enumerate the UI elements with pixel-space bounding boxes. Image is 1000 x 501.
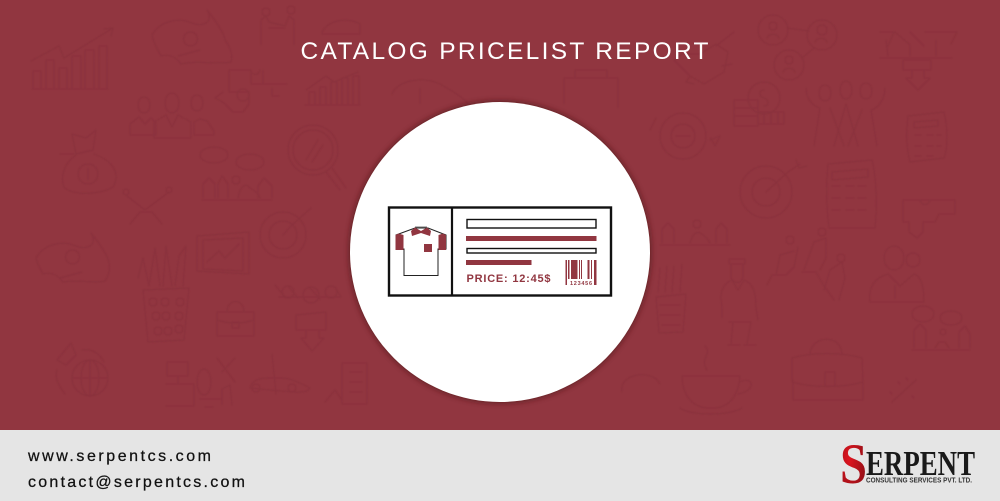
icon: windmill and car (250, 354, 310, 394)
logo: Serpent Consulting Services (840, 433, 975, 496)
icon: bellboy (721, 259, 758, 345)
icon: talking people 2 (660, 220, 730, 245)
icon: group and arrow (275, 285, 341, 351)
icon: people and arrow (880, 32, 957, 90)
icon: three people (130, 93, 214, 138)
icon: desk and person (166, 358, 235, 407)
red text line 2 (466, 260, 532, 265)
icon: idea cloud (392, 80, 468, 104)
icon: scattered dots (890, 378, 916, 402)
icon: briefcase (217, 302, 254, 336)
central white circle (350, 102, 650, 402)
icon: network (123, 187, 172, 224)
icon: speech blob (622, 375, 660, 392)
outlined text line 2 (467, 248, 596, 253)
icon: banknotes 2 (36, 233, 109, 282)
icon: screen chart (197, 232, 249, 274)
icon: coffee cup (680, 346, 751, 414)
contact email: contact@serpentcs.com (28, 474, 245, 491)
icon: archery target (740, 160, 807, 218)
icon: money stack top (322, 20, 360, 34)
logo: Serpent Consulting Services: S (840, 433, 867, 496)
icon: globe (56, 343, 108, 396)
card divider (451, 207, 453, 296)
icon: businessman with bulb (870, 246, 924, 302)
icon: polo shirt (396, 227, 446, 276)
icon: calculator (827, 160, 876, 228)
icon: clipboard (564, 70, 618, 108)
icon: cheering people (806, 81, 885, 146)
circle shadow (349, 101, 651, 403)
icon: puzzle 2 (903, 200, 955, 238)
icon: small chart (305, 72, 360, 105)
icon: target (260, 208, 311, 258)
icon: puzzle (215, 70, 287, 112)
icon: connected people (758, 15, 837, 80)
website address: www.serpentcs.com (27, 448, 211, 465)
card frame (389, 208, 611, 296)
icon: pencil cup (138, 246, 189, 342)
icon: small calculator (907, 112, 947, 162)
red text line 1 (466, 236, 596, 241)
icon: talk pair (912, 306, 970, 350)
barcode: 123456 (570, 281, 592, 287)
icon: large briefcase (792, 339, 863, 400)
price label: PRICE: 12:45$ (466, 273, 550, 285)
icon: figures on steps (767, 228, 845, 300)
icon: handshake (674, 32, 734, 84)
icon: magnifier (288, 125, 346, 190)
icon: ledger book (325, 363, 367, 404)
faint background icons (31, 6, 970, 414)
icon: cart and people top (261, 6, 295, 45)
icon: gear cycle (650, 113, 720, 159)
icon: pencil cup 2 (656, 264, 686, 333)
icon: talking people (200, 147, 272, 200)
barcode (566, 260, 596, 287)
outlined text line 1 (467, 220, 596, 228)
icon: coins (734, 82, 784, 126)
footer band (0, 430, 1000, 501)
logo: Serpent Consulting Services: CONSULTING SERVICES PVT. LTD. (866, 478, 972, 484)
icon: money bag (60, 130, 116, 193)
title: CATALOG PRICELIST REPORT (300, 38, 709, 65)
icon: growth chart (31, 28, 113, 89)
icon: banknotes (152, 10, 232, 64)
icon: catalog price card (389, 207, 611, 296)
